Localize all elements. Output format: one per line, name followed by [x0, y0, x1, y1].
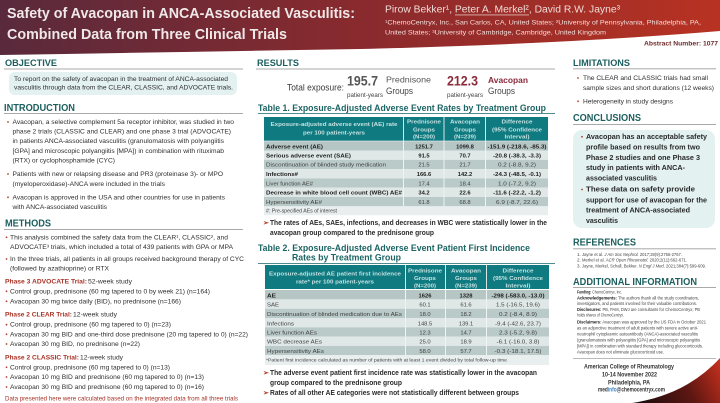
table 1 values: 1.0 (-7.2, 9.2) — [498, 181, 536, 187]
conclusions callout: associated vasculitis — [586, 174, 657, 183]
table 1 header — [264, 117, 548, 141]
funding and disclosures text: as an adjunctive treatment of adult patients with severe active anti- — [577, 325, 698, 330]
table 1 header: Interval) — [504, 135, 530, 141]
phase 2 classic trial: Avacopan 30 mg BID and prednisone (60 mg tapered to 0) (n=16) — [10, 384, 204, 391]
heading: results: RESULTS — [257, 58, 299, 69]
panel: objective — [4, 58, 243, 95]
total exposure summary: Groups — [386, 86, 413, 96]
conclusions callout — [573, 130, 715, 228]
introduction bullets: [GPA] and microscopic polyangiitis [MPA]) in combination with rituximab — [12, 148, 224, 155]
title — [7, 5, 355, 43]
funding and disclosures text: investigators, and patients involved for their valuable contributions. — [577, 301, 697, 306]
authors: ¹ChemoCentryx, Inc., San Carlos, CA, United States; ²University of Pennsylvania, Philadelphia, PA, — [385, 20, 701, 26]
table 2 header: Groups — [414, 276, 436, 282]
table 2 values: 1.5 (-16.5, 19.6) — [496, 303, 540, 309]
title: Safety of Avacopan in ANCA-Associated Vasculitis: — [7, 5, 355, 22]
reference list: 2. — [577, 258, 581, 263]
table 1 values: 142.2 — [458, 172, 472, 178]
table 1 row labels: #: Pre-specified AEs of interest — [266, 209, 338, 215]
table 2 values: 60.1 — [419, 303, 431, 309]
introduction bullets: (myeloperoxidase)-ANCA were included in the trials — [12, 181, 166, 188]
table 1 row labels — [266, 144, 403, 215]
table 2 header: Exposure-adjusted AE patient first incidence — [269, 271, 402, 277]
table 1 values: 1099.8 — [456, 144, 475, 150]
objective callout — [9, 72, 237, 95]
total exposure summary: 212.3 — [447, 73, 478, 89]
table 1 header: Prednisone — [407, 120, 442, 126]
table 1 row labels: Decrease in white blood cell count (WBC) AE# — [266, 190, 403, 196]
table 1 row labels: Infections# — [266, 172, 299, 178]
table 1 values: 166.6 — [417, 172, 432, 178]
table 1 header: Groups — [454, 127, 476, 133]
authors — [385, 5, 701, 36]
table 2 values: 61.6 — [460, 303, 472, 309]
table 2 values: 18.0 — [419, 312, 431, 318]
table 2 header: Groups — [455, 276, 477, 282]
phase 2 classic trial: Avacopan 10 mg BID and prednisone (60 mg tapered to 0) (n=13) — [10, 374, 204, 381]
table 2 values: 14.7 — [460, 331, 472, 337]
conclusions callout: treatment of ANCA-associated — [586, 206, 690, 215]
phase 2 classic trial: 12-week study — [80, 354, 124, 361]
table 1 header: (95% Confidence — [492, 127, 543, 133]
table 1 values: -20.8 (-38.3, -3.3) — [493, 154, 541, 160]
introduction bullets: (RTX) or cyclophosphamide (CYC) — [12, 158, 115, 165]
authors: United States; ³University of Cambridge, Cambridge, United Kingdom — [385, 30, 607, 36]
phase 2 clear trial: Avacopan 30 mg BID and one-third dose prednisone (20 mg tapered to 0) (n=22) — [10, 331, 248, 338]
phase 2 classic trial — [5, 354, 204, 391]
total exposure summary: Avacopan — [488, 76, 528, 85]
introduction bullets — [7, 119, 234, 211]
table 2 values: 57.7 — [460, 349, 472, 355]
phase 3 advocate trial: 52-week study — [88, 279, 133, 286]
panel: introduction — [4, 102, 243, 211]
table 1 row labels: Hypersensitivity AE# — [266, 200, 323, 206]
table 1 header: Avacopan — [450, 120, 480, 126]
table 1 values: 0.2 (-8.8, 9.2) — [498, 163, 536, 169]
phase 2 clear trial: 12-week study — [73, 312, 118, 319]
table 2 header: Difference — [502, 269, 534, 275]
abstract number: Abstract Number: 1077 — [644, 41, 718, 48]
funding and disclosures text: Disclosures: PB, PAM, DWJ are consultants for ChemoCentryx; PB — [577, 307, 700, 312]
panel: results — [256, 58, 555, 397]
reference list: 3. — [577, 264, 581, 269]
table 2 values: 0.2 (-8.4, 8.9) — [499, 312, 537, 318]
conference information — [584, 363, 674, 394]
table 2 values: 1328 — [460, 293, 473, 299]
heading: methods: METHODS — [5, 219, 51, 230]
table 2 values: 58.0 — [419, 349, 431, 355]
introduction bullets: in patients ANCA-associated vasculitis (granulomatosis with polyangiitis — [12, 138, 225, 145]
total exposure summary: patient-years — [447, 92, 483, 99]
total exposure summary: patient-years — [347, 92, 383, 99]
phase 2 classic trial: Control group, prednisone (60 mg tapered to 0) (n=13) — [10, 364, 170, 371]
table 1 takeaway — [263, 220, 547, 237]
funding and disclosures text: (granulomatosis with polyangiitis [GPA] and microscopic polyangiitis — [577, 337, 701, 342]
funding and disclosures text: Avacopan does not eliminate glucocorticoid use. — [577, 349, 664, 354]
heading: additional information: ADDITIONAL INFORMATION — [573, 276, 697, 288]
phase 3 advocate trial: Control group, prednisone (60 mg tapered to 0 by week 21) (n=164) — [10, 288, 210, 295]
limitations bullets: Heterogeneity in study designs — [583, 98, 674, 105]
table 1 values: 21.7 — [459, 163, 471, 169]
objective callout: vasculitis through data from the CLEAR, CLASSIC, and ADVOCATE trials. — [14, 84, 233, 92]
panel: additional information — [573, 276, 716, 359]
table 2 takeaways: ➢ — [263, 370, 270, 377]
total exposure summary: Total exposure: — [287, 83, 344, 94]
table 2 row labels: WBC decrease AEs — [267, 340, 322, 346]
total exposure summary: Groups — [488, 86, 515, 96]
methods overview bullets: This analysis combined the safety data from the CLEAR¹, CLASSIC², and — [10, 234, 228, 241]
table 2 takeaways: ➢ — [263, 390, 270, 397]
funding and disclosures text — [577, 289, 706, 354]
table 1 values: -24.3 (-48.5, -0.1) — [493, 172, 541, 178]
table 1 header: Difference — [502, 120, 533, 126]
funding and disclosures text: Acknowledgements: The authors thank all the study coordinators, — [577, 295, 699, 300]
introduction bullets: phase 2 trials (CLASSIC and CLEAR) and one phase 3 trial (ADVOCATE) — [12, 128, 231, 136]
conference information: 10-14 November 2022 — [602, 372, 657, 379]
reference list: 1. — [577, 252, 581, 257]
table 1 — [264, 117, 548, 215]
table 1 takeaway: avacopan group compared to the prednisone group — [270, 230, 434, 237]
reference list: Jayne et al. J Am Soc Nephrol. 2017;28(9):2756-2767. — [582, 252, 682, 257]
table 2 header: Prednisone — [408, 269, 443, 275]
table 1 row labels: Adverse event (AE) — [266, 144, 323, 150]
conclusions callout: Phase 2 studies and one Phase 3 — [586, 153, 700, 162]
table 2 takeaways: group compared to the prednisone group — [270, 380, 402, 387]
objective callout: To report on the safety of avacopan in the treatment of ANCA-associated — [14, 76, 228, 83]
table 2 takeaways: The adverse event patient first incidence rate was statistically lower in the avacopan — [270, 370, 537, 377]
conclusions callout: These data on safety provide — [586, 185, 695, 194]
table 2 values: -9.4 (-42.6, 23.7) — [495, 321, 541, 327]
methods overview bullets: In the three trials, all patients in all groups received background therapy of CYC — [10, 256, 244, 263]
panel: methods — [4, 219, 248, 403]
reference list — [577, 252, 706, 269]
table 1 header: Exposure-adjusted adverse event (AE) rate — [270, 122, 398, 128]
limitations bullets — [577, 75, 714, 105]
table 2 header — [265, 265, 549, 290]
table 2 values: 148.5 — [418, 321, 432, 327]
funding and disclosures text: neutrophil cytoplasmic autoantibody (ANCA)-associated vasculitis — [577, 331, 699, 336]
table 2 row labels: *Patient first incidence calculated as number of patients with at least 1 event divided by total follow-up time — [266, 358, 507, 364]
conference information: Philadelphia, PA — [608, 379, 650, 386]
phase 2 classic trial: Phase 2 CLASSIC Trial: — [5, 354, 79, 361]
heading: limitations: LIMITATIONS — [573, 58, 630, 69]
conclusions callout: vasculitis — [586, 216, 618, 225]
table 1 row labels: Liver function AE# — [266, 181, 314, 187]
funding and disclosures text: holds shares of ChemoCentryx. — [577, 313, 624, 318]
table 1 header: per 100 patient-years — [303, 130, 365, 136]
conclusions callout: support for use of avacopan for the — [586, 195, 707, 204]
panel: conclusions — [573, 113, 716, 228]
conference information: medinfo@chemocentryx.com — [598, 387, 665, 394]
table 2 header: rate* per 100 patient-years — [296, 279, 374, 285]
table 1 values: -11.6 (-22.2, -1.2) — [493, 190, 541, 196]
table 1 values: 70.7 — [459, 154, 471, 160]
table 2 values: 18.9 — [460, 340, 472, 346]
table 1 values: 21.5 — [418, 163, 430, 169]
table 2 row backgrounds — [265, 290, 549, 365]
heading: table 1: Table 1. Exposure-Adjusted Adverse Event Rates by Treatment Group — [258, 103, 546, 113]
table 1 takeaway: The rates of AEs, SAEs, infections, and decreases in WBC were statistically lower in the — [270, 220, 547, 227]
limitations bullets: sample sizes and short durations (12 weeks) — [583, 85, 714, 92]
heading: table 2 — [258, 243, 530, 263]
phase 2 clear trial: Avacopan 30 mg BID, no prednisone (n=22) — [10, 341, 140, 348]
table 2 values: 2.3 (-5.2, 9.8) — [499, 331, 537, 337]
reference list: Jayne, Merkel, Schall, Bekker. N Engl J Med. 2021;384(7):599-609. — [582, 264, 706, 269]
table 1 values: 91.5 — [418, 154, 430, 160]
table 1 row labels: Discontinuation of blinded study medication — [266, 163, 386, 169]
conclusions callout: study in patients with ANCA- — [586, 163, 686, 172]
table 2 row labels: Liver function AEs — [267, 331, 317, 337]
panel: references — [573, 238, 716, 269]
table 2 — [265, 265, 549, 365]
methods overview bullets: ADVOCATE³ trials, which included a total of 439 patients with GPA or MPA — [10, 244, 234, 251]
table 2 values: 139.1 — [459, 321, 473, 327]
phase 3 advocate trial: Avacopan 30 mg twice daily (BID), no prednisone (n=166) — [10, 298, 181, 305]
phase 3 advocate trial: Phase 3 ADVOCATE Trial: — [5, 279, 87, 286]
total exposure summary: Prednisone — [386, 76, 432, 85]
table 1 values: 61.8 — [418, 200, 430, 206]
table 1 row labels: Serious adverse event (SAE) — [266, 154, 351, 160]
phase 2 clear trial — [5, 312, 248, 348]
header banner — [0, 0, 720, 55]
heading: references: REFERENCES — [573, 238, 636, 249]
methods overview bullets: (followed by azathioprine) or RTX — [10, 266, 110, 273]
limitations bullets: The CLEAR and CLASSIC trials had small — [583, 75, 709, 82]
introduction bullets: Avacopan, a selective complement 5a receptor inhibitor, was studied in two — [12, 119, 234, 126]
table 1 values: 34.2 — [418, 190, 430, 196]
heading: table 2: Table 2. Exposure-Adjusted Adverse Event Patient First Incidence — [258, 243, 530, 253]
table 2 header: (N=239) — [455, 284, 477, 290]
table 2 header: Interval) — [506, 284, 531, 290]
table 2 row labels: AE — [267, 293, 276, 299]
table 2 values: -6.1 (-16.0, 3.8) — [496, 340, 540, 346]
table 1 header: Groups — [413, 127, 435, 133]
table 1 takeaway: ➢ — [263, 220, 270, 227]
heading: conclusions: CONCLUSIONS — [573, 113, 641, 124]
table 2 row labels: Hypersensitivity AEs — [267, 349, 324, 355]
introduction bullets: Avacopan is approved in the USA and other countries for use in patients — [12, 194, 226, 201]
conference information: American College of Rheumatology — [584, 363, 674, 370]
table 1 header: (N=200) — [413, 135, 435, 141]
table 1 values: 22.6 — [459, 190, 471, 196]
table 2 values: -0.3 (-18.1, 17.5) — [494, 349, 542, 355]
reference list: Merkel et al. ACR Open Rheumatol. 2020;2(11):662-671. — [582, 258, 687, 263]
table 1 values: 17.4 — [418, 181, 430, 187]
methods overview bullets — [6, 234, 244, 273]
heading: introduction: INTRODUCTION — [4, 102, 75, 114]
conclusions callout: profile based on results from two — [586, 142, 700, 151]
table 2 header: Avacopan — [451, 269, 481, 275]
table 1 values — [415, 144, 547, 206]
table 2 row labels: SAE — [267, 303, 279, 309]
table 2 header: (N=200) — [414, 284, 436, 290]
table 2 row labels: Discontinuation of blinded medication due to AEs — [267, 312, 402, 318]
decorative corner swoosh — [632, 358, 720, 403]
title: Combined Data from Three Clinical Trials — [7, 26, 287, 43]
table 2 values: 1626 — [419, 293, 432, 299]
table 2 takeaways: Rates of all other AE categories were not statistically different between groups — [270, 390, 519, 397]
table 1 values: 18.4 — [459, 181, 471, 187]
table 1 values: 1251.7 — [415, 144, 433, 150]
heading: objective: OBJECTIVE — [5, 58, 57, 69]
table 2 takeaways — [263, 370, 537, 397]
table 2 values: -298 (-583.0, -13.0) — [492, 293, 545, 299]
authors: Pirow Bekker¹, Peter A. Merkel², David R.W. Jayne³ — [385, 5, 621, 16]
conclusions callout: Avacopan has an acceptable safety — [586, 132, 708, 141]
phase 2 clear trial: Phase 2 CLEAR Trial: — [5, 312, 72, 319]
heading: table 2: Rates by Treatment Group — [292, 253, 401, 263]
funding and disclosures text: Disclaimers: Avacopan was approved by the US FDA in October 2021 — [577, 319, 706, 324]
table 2 values — [418, 293, 545, 355]
table 1 header: (N=239) — [454, 135, 476, 141]
total exposure summary: 195.7 — [347, 73, 378, 89]
table 2 row labels: Infections — [267, 321, 294, 327]
table 2 row labels — [266, 293, 507, 364]
table 2 header: (95% Confidence — [493, 276, 544, 282]
phase 2 clear trial: Control group, prednisone (60 mg tapered to 0) (n=23) — [10, 322, 171, 329]
table 1 values: -151.9 (-218.6, -85.3) — [488, 144, 547, 150]
introduction bullets: Patients with new or relapsing disease and PR3 (proteinase 3)- or MPO — [12, 171, 223, 178]
table 2 values: 12.3 — [419, 331, 431, 337]
phase 3 advocate trial — [5, 279, 210, 305]
panel: limitations — [573, 58, 716, 105]
funding and disclosures text: Funding: ChemoCentryx, Inc. — [577, 289, 622, 294]
introduction bullets: with ANCA-associated vasculitis — [11, 204, 108, 211]
table 2 values: 18.2 — [460, 312, 472, 318]
funding and disclosures text: [MPA]) in combination with standard therapy including glucocorticoids. — [577, 343, 703, 348]
table 2 values: 25.0 — [419, 340, 431, 346]
table 1 values: 6.9 (-8.7, 22.6) — [496, 200, 538, 206]
total exposure summary — [287, 73, 528, 99]
methods note: Data presented here were calculated based on the integrated data from all three trials — [5, 396, 239, 403]
table 1 values: 68.8 — [459, 200, 471, 206]
table 1 row backgrounds — [264, 141, 548, 215]
